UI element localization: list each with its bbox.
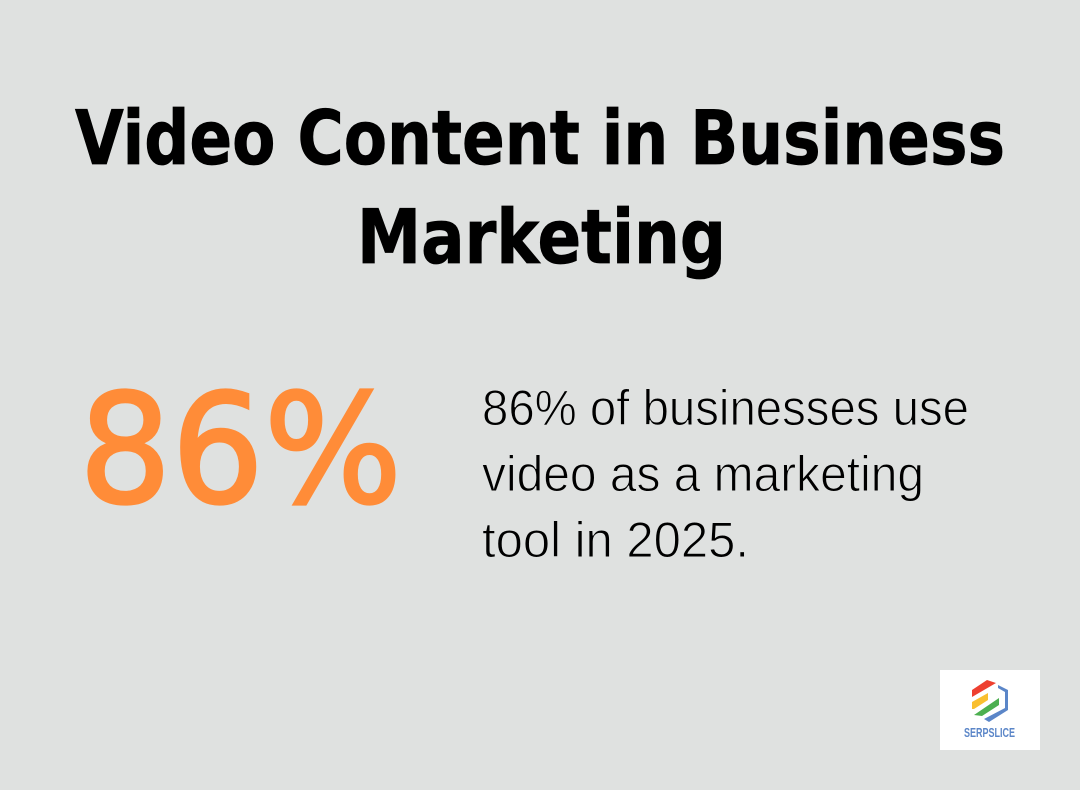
statistic description: 86% of businesses use [482, 380, 969, 436]
statistic description [482, 380, 969, 568]
logo: SerpSlice [940, 670, 1040, 750]
statistic description: tool in 2025. [482, 512, 749, 568]
big statistic: 86%: 86% [79, 362, 402, 538]
icon: hexagon stripes [972, 680, 1008, 722]
title: Marketing [357, 193, 726, 281]
statistic description: video as a marketing [482, 446, 924, 502]
logo wordmark: SERPSLICE [964, 726, 1015, 740]
title [75, 94, 1005, 281]
